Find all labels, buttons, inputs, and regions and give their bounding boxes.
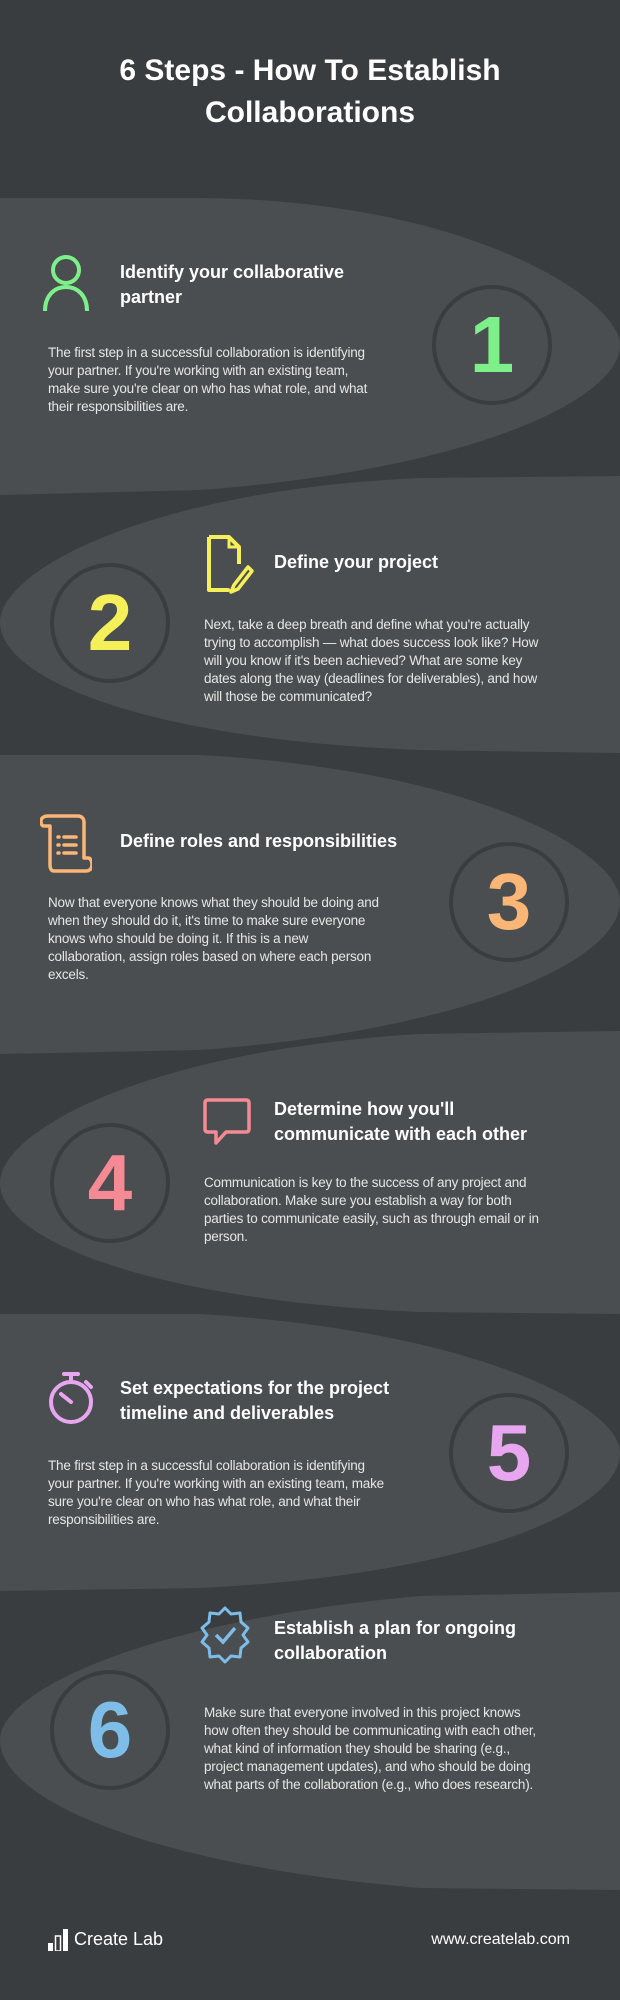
number 6 xyxy=(50,1670,170,1790)
footer logo: Create Lab xyxy=(74,1929,163,1949)
title: 6 Steps - How To Establish xyxy=(119,54,501,87)
step 1 xyxy=(43,255,552,414)
icon: scroll list xyxy=(40,814,92,873)
text: Make sure that everyone involved in this project knows xyxy=(204,1705,520,1720)
heading: timeline and deliverables xyxy=(120,1403,334,1423)
text: what parts of the collaboration (e.g., who does research). xyxy=(204,1777,533,1792)
text xyxy=(48,1458,384,1527)
number 1 xyxy=(432,285,552,405)
text: trying to accomplish — what does success look like? How xyxy=(204,635,538,650)
heading xyxy=(120,1378,389,1423)
number 1: 1 xyxy=(470,300,514,389)
text: knows who should be doing it. If this is a new xyxy=(48,931,308,946)
number 6: 6 xyxy=(88,1685,132,1774)
step 4 xyxy=(50,1098,539,1244)
heading xyxy=(120,262,344,307)
number 5: 5 xyxy=(487,1408,531,1497)
text xyxy=(204,1175,539,1244)
text: your partner. If you're working with an existing team, xyxy=(48,363,348,378)
text xyxy=(48,345,368,414)
text: The first step in a successful collaboration is identifying xyxy=(48,1458,365,1473)
text: person. xyxy=(204,1229,248,1244)
heading: Define your project xyxy=(274,552,438,572)
icon: person xyxy=(43,255,89,311)
text: their responsibilities are. xyxy=(48,399,188,414)
text: your partner. If you're working with an existing team, make xyxy=(48,1476,384,1491)
step 5 xyxy=(48,1372,569,1527)
heading: collaboration xyxy=(274,1643,387,1663)
text: collaboration. Make sure you establish a way for both xyxy=(204,1193,512,1208)
heading: Define roles and responsibilities xyxy=(120,831,397,851)
text: Now that everyone knows what they should be doing and xyxy=(48,895,379,910)
icon: badge check xyxy=(200,1606,250,1664)
number 3: 3 xyxy=(487,857,531,946)
text: project management updates), and who should be doing xyxy=(204,1759,531,1774)
text: collaboration, assign roles based on where each person xyxy=(48,949,371,964)
text: responsibilities are. xyxy=(48,1512,159,1527)
icon: document pencil xyxy=(207,535,254,594)
text xyxy=(48,895,379,982)
heading: Set expectations for the project xyxy=(120,1378,389,1398)
heading xyxy=(274,1618,516,1663)
heading: Establish a plan for ongoing xyxy=(274,1618,516,1638)
text: make sure you're clear on who has what role, and what xyxy=(48,381,367,396)
text: will those be communicated? xyxy=(204,689,372,704)
title xyxy=(119,54,501,129)
step 2 xyxy=(50,535,538,704)
heading: Identify your collaborative xyxy=(120,262,344,282)
heading: communicate with each other xyxy=(274,1124,527,1144)
number 3 xyxy=(449,842,569,962)
heading: partner xyxy=(120,287,182,307)
heading: Determine how you'll xyxy=(274,1099,454,1119)
text: parties to communicate easily, such as through email or in xyxy=(204,1211,539,1226)
step 3 xyxy=(40,814,569,982)
number 4: 4 xyxy=(88,1138,132,1227)
number 2 xyxy=(50,563,170,683)
text: when they should do it, it's time to make sure everyone xyxy=(48,913,365,928)
text: Next, take a deep breath and define what you're actually xyxy=(204,617,529,632)
text: excels. xyxy=(48,967,89,982)
step 6 xyxy=(50,1606,536,1792)
text: what kind of information they should be sharing (e.g., xyxy=(204,1741,510,1756)
number 4 xyxy=(50,1123,170,1243)
number 5 xyxy=(449,1393,569,1513)
icon: bars xyxy=(48,1929,68,1951)
text: dates along the way (deadlines for deliverables), and how xyxy=(204,671,537,686)
icon: stopwatch xyxy=(49,1372,94,1424)
title: Collaborations xyxy=(205,96,415,129)
heading xyxy=(274,1099,527,1144)
text: will you know if it's been achieved? What are some key xyxy=(204,653,522,668)
text xyxy=(204,1705,536,1792)
text xyxy=(204,617,538,704)
text: sure you're clear on who has what role, and what their xyxy=(48,1494,360,1509)
text: how often they should be communicating with each other, xyxy=(204,1723,536,1738)
number 2: 2 xyxy=(88,578,132,667)
footer url: www.createlab.com xyxy=(431,1931,570,1948)
icon: speech bubble xyxy=(203,1098,251,1145)
text: Communication is key to the success of any project and xyxy=(204,1175,526,1190)
text: The first step in a successful collaboration is identifying xyxy=(48,345,365,360)
